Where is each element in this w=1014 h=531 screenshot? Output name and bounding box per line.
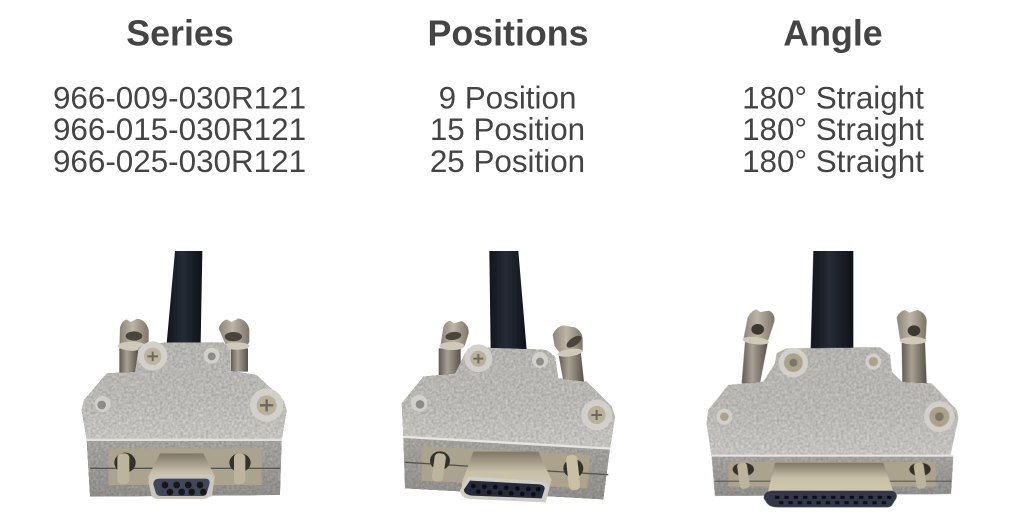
shell front bbox=[87, 440, 282, 497]
text block: position counts: 15 Position bbox=[430, 112, 585, 147]
shell top bbox=[707, 347, 958, 457]
text block: series part numbers: 966-025-030R121 bbox=[53, 144, 306, 179]
pin holes bbox=[471, 484, 541, 497]
shell front bbox=[712, 456, 953, 496]
text block: angle values: 180° Straight bbox=[742, 144, 924, 179]
text block: angle values bbox=[742, 81, 924, 179]
title: Series: Series bbox=[126, 14, 234, 54]
right thumbscrew bbox=[219, 318, 249, 372]
neck bbox=[462, 452, 552, 497]
socket face bbox=[764, 491, 897, 507]
shell top bbox=[402, 347, 615, 448]
socket face bbox=[149, 474, 214, 499]
text block: angle values: 180° Straight bbox=[742, 81, 924, 116]
text block: angle values: 180° Straight bbox=[742, 112, 924, 147]
recess bbox=[422, 446, 590, 488]
title: Angle: Angle bbox=[783, 14, 883, 54]
left thumbscrew bbox=[742, 309, 775, 383]
recess bbox=[108, 448, 262, 485]
right thumbscrew bbox=[553, 325, 584, 382]
text block: series part numbers bbox=[53, 81, 306, 179]
cable bbox=[811, 251, 853, 350]
icon: 25 position connector bbox=[707, 251, 958, 507]
jack screws bbox=[430, 451, 583, 491]
shell top bbox=[82, 342, 287, 440]
left thumbscrew bbox=[439, 321, 469, 375]
pin holes bbox=[162, 482, 207, 495]
jack screws bbox=[114, 453, 251, 484]
left thumbscrew bbox=[118, 319, 149, 373]
pin holes bbox=[775, 497, 892, 503]
jack screws bbox=[733, 462, 931, 489]
shell front bbox=[403, 437, 610, 499]
cable bbox=[167, 251, 202, 343]
text block: series part numbers: 966-015-030R121 bbox=[53, 112, 306, 147]
icon: 15 position connector bbox=[402, 251, 615, 502]
icon: 9 position connector bbox=[82, 251, 287, 499]
text block: position counts bbox=[430, 81, 585, 179]
text block: position counts: 9 Position bbox=[439, 81, 576, 116]
title: Positions: Positions bbox=[427, 14, 589, 54]
text block: series part numbers: 966-009-030R121 bbox=[53, 81, 306, 116]
screw heads bbox=[411, 344, 612, 430]
screw heads bbox=[716, 348, 955, 432]
text block: position counts: 25 Position bbox=[430, 144, 585, 179]
neck bbox=[148, 453, 215, 497]
right thumbscrew bbox=[897, 310, 927, 383]
socket face bbox=[460, 477, 549, 502]
recess bbox=[728, 462, 936, 487]
neck bbox=[767, 463, 895, 497]
screw heads bbox=[95, 341, 283, 422]
cable bbox=[489, 251, 527, 350]
